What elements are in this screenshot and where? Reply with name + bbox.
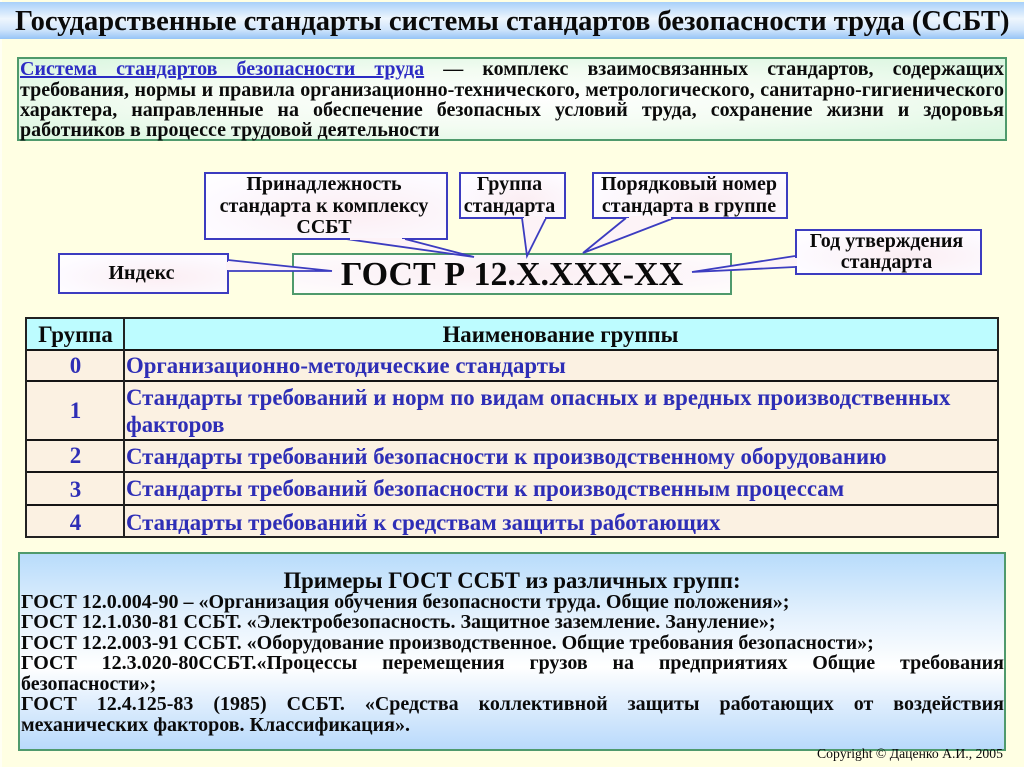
callout: belonging to complex: Принадлежность bbox=[246, 173, 402, 195]
callout: group: Группа bbox=[477, 173, 542, 195]
examples list: ГОСТ 12.4.125-83 (1985) ССБТ. «Средства коллективной защиты работающих от воздействия bbox=[21, 693, 1004, 715]
GOST designation box bbox=[292, 253, 732, 295]
definition text: Система стандартов безопасности труда — комплекс взаимосвязанных стандартов, содержащих bbox=[20, 58, 1004, 80]
definition text: характера, направленные на обеспечение безопасных условий труда, сохранение жизни и здоровья bbox=[20, 99, 1004, 121]
panel: examples bbox=[18, 552, 1006, 751]
header: group: Группа bbox=[38, 322, 113, 347]
callout: belonging to complex: ССБТ bbox=[296, 216, 352, 238]
examples list: безопасности»; bbox=[21, 673, 156, 695]
table: ssbt groups bbox=[25, 317, 999, 538]
callout: index bbox=[58, 253, 229, 294]
copyright: Copyright © Даценко А.И., 2005 bbox=[817, 746, 1003, 761]
row 1: факторов bbox=[126, 412, 224, 437]
callout: belonging to complex: стандарта к комплексу bbox=[220, 195, 428, 217]
callout: year: стандарта bbox=[841, 251, 932, 273]
row 3: 3 bbox=[70, 477, 81, 502]
definition text: требования, нормы и правила организационно-технического, метрологического, санитарно-гигиенического bbox=[20, 79, 1004, 101]
header: group name: Наименование группы bbox=[443, 322, 678, 347]
examples list: ГОСТ 12.1.030-81 ССБТ. «Электробезопасность. Защитное заземление. Зануление»; bbox=[21, 611, 776, 633]
callout: group: стандарта bbox=[464, 195, 555, 217]
callout: serial number: Порядковый номер bbox=[601, 173, 777, 195]
row 3: Стандарты требований безопасности к производственным процессам bbox=[126, 476, 844, 501]
row 0 bbox=[27, 349, 997, 381]
row 1 bbox=[27, 380, 997, 439]
page edge bbox=[0, 0, 2, 767]
callout: serial number: стандарта в группе bbox=[602, 195, 776, 217]
definition text bbox=[20, 58, 1004, 141]
examples heading: Примеры ГОСТ ССБТ из различных групп: bbox=[283, 568, 741, 593]
examples list: ГОСТ 12.0.004-90 – «Организация обучения безопасности труда. Общие положения»; bbox=[21, 591, 789, 613]
callout: year: Год утверждения bbox=[810, 230, 963, 252]
row 1: 1 bbox=[70, 398, 81, 423]
callout: year bbox=[795, 229, 982, 275]
row 1: Стандарты требований и норм по видам опасных и вредных производственных bbox=[126, 385, 950, 410]
examples list: ГОСТ 12.2.003-91 ССБТ. «Оборудование производственное. Общие требования безопасности»; bbox=[21, 632, 874, 654]
column divider bbox=[123, 319, 125, 536]
row 3 bbox=[27, 471, 997, 504]
GOST designation: ГОСТ Р 12.Х.ХХХ-ХХ bbox=[341, 256, 683, 293]
row 4: Стандарты требований к средствам защиты работающих bbox=[126, 510, 720, 535]
row 2: 2 bbox=[70, 443, 81, 468]
table header bbox=[27, 319, 997, 350]
row 4 bbox=[27, 504, 997, 536]
title: Государственные стандарты системы стандартов безопасности труда (ССБТ) bbox=[15, 6, 1009, 37]
callout: index: Индекс bbox=[108, 262, 174, 284]
row 2 bbox=[27, 439, 997, 471]
row 4: 4 bbox=[70, 510, 81, 535]
examples list: механических факторов. Классификация». bbox=[21, 714, 410, 736]
panel: definition bbox=[17, 57, 1007, 141]
row 2: Стандарты требований безопасности к производственному оборудованию bbox=[126, 444, 887, 469]
row 0: Организационно-методические стандарты bbox=[126, 353, 566, 378]
callout: belonging to complex bbox=[204, 172, 448, 240]
row 0: 0 bbox=[70, 353, 81, 378]
definition text: работников в процессе трудовой деятельности bbox=[20, 119, 440, 141]
examples list bbox=[21, 591, 1004, 736]
callout: group bbox=[459, 172, 566, 219]
examples list: ГОСТ 12.3.020-80ССБТ.«Процессы перемещения грузов на предприятиях Общие требования bbox=[21, 652, 1004, 674]
title banner bbox=[0, 2, 1024, 39]
callout: serial number bbox=[592, 172, 788, 219]
